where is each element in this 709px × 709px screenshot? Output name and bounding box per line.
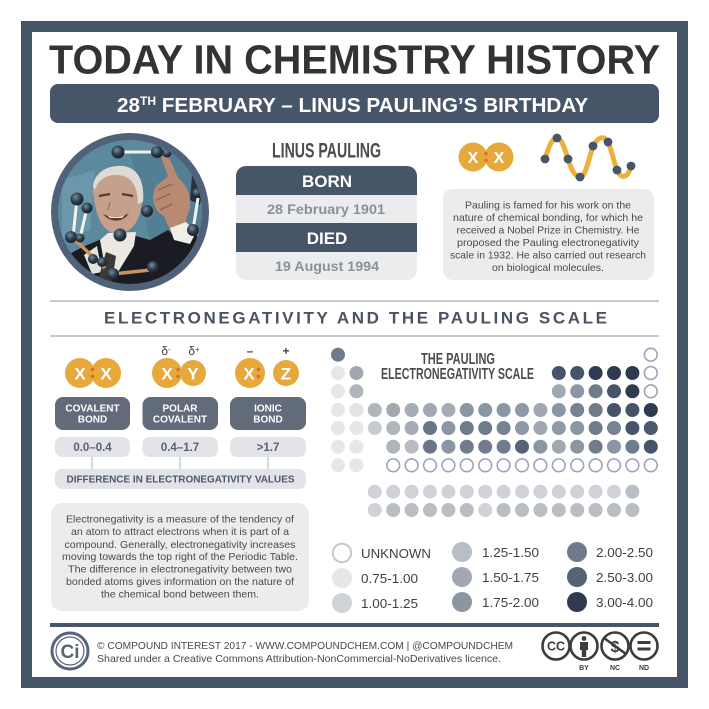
legend item: 3.00-4.00 [567, 592, 653, 612]
electronegativity explanation panel: compound. Generally, electronegativity increases [64, 540, 296, 551]
legend item: 2.50-3.00: 2.50-3.00 [596, 571, 653, 585]
biography text panel: nature of chemical bonding, for which he [453, 213, 643, 224]
icon: covalent bond atoms [65, 358, 121, 388]
legend [332, 542, 653, 613]
icon: polar covalent atoms: + [195, 345, 200, 354]
label: polar covalent: POLAR [162, 404, 198, 414]
legend item: 1.50-1.75: 1.50-1.75 [482, 571, 539, 585]
credit text: © COMPOUND INTEREST 2017 - WWW.COMPOUNDCHEM.COM | @COMPOUNDCHEM [97, 641, 513, 652]
legend item: 1.75-2.00: 1.75-2.00 [482, 596, 539, 610]
icon: NC: NC [610, 665, 620, 672]
Linus Pauling name heading: LINUS PAULING [272, 140, 381, 162]
icon: wave with atoms [541, 134, 635, 181]
label: covalent bond: BOND [78, 414, 107, 426]
electronegativity explanation panel: the chemical bond between them. [101, 590, 259, 601]
date banner [50, 84, 659, 123]
icon: polar covalent atoms: δ [161, 344, 168, 358]
periodic table dot chart [331, 348, 658, 517]
portrait of Linus Pauling [50, 133, 210, 300]
icon: covalent atoms: X [468, 150, 479, 167]
title: TODAY IN CHEMISTRY HISTORY [49, 36, 660, 82]
bonds [73, 152, 198, 238]
label: covalent bond: COVALENT [65, 404, 120, 414]
born and died table: DIED [307, 229, 347, 248]
periodic table heading: THE PAULING [421, 351, 495, 368]
icon: BY: BY [579, 665, 589, 672]
legend item: 1.25-1.50 [452, 542, 539, 562]
biography text panel: scale in 1932. He also carried out research [450, 250, 646, 261]
electronegativity explanation panel: an atom to attract electrons when it is part of a [71, 527, 289, 538]
biography text panel [443, 189, 654, 280]
Compound Interest logo [52, 633, 88, 669]
bond diagrams [55, 344, 306, 489]
Compound Interest logo: Ci [60, 642, 80, 663]
icon: covalent atoms: X [494, 150, 505, 167]
legend item: 1.00-1.25 [332, 593, 418, 613]
born and died table: 19 August 1994 [275, 258, 379, 274]
electronegativity explanation panel: moving towards the top right of the Periodic Table. [62, 552, 298, 563]
icon: ionic atoms: X [243, 364, 255, 384]
label: ionic bond [230, 397, 306, 430]
icon: polar covalent atoms: X [161, 364, 173, 384]
legend item: unknown: UNKNOWN [361, 547, 431, 561]
biography text panel: proposed the Pauling electronegativity [457, 238, 640, 249]
legend item: 2.00-2.50 [567, 542, 653, 562]
date banner: 28 [117, 94, 140, 117]
value: 0.0–0.4 [55, 437, 130, 457]
legend item: 1.00-1.25: 1.00-1.25 [361, 597, 418, 611]
electronegativity explanation panel: The difference in electronegativity between two [68, 565, 292, 576]
biography text panel: Pauling is famed for his work on the [465, 200, 631, 212]
born and died table: 28 February 1901 [267, 201, 385, 217]
icon: ionic atoms: – [247, 344, 254, 358]
difference in electronegativity bar: DIFFERENCE IN ELECTRONEGATIVITY VALUES [66, 474, 295, 486]
hand [153, 156, 190, 230]
legend item: unknown [333, 544, 431, 562]
legend item: 3.00-4.00: 3.00-4.00 [596, 596, 653, 610]
born and died table: BORN [302, 172, 352, 191]
label: ionic bond: IONIC [254, 404, 282, 414]
value: 0.4–1.7: 0.4–1.7 [161, 442, 199, 454]
icon: polar covalent atoms: δ [188, 344, 195, 358]
atoms [65, 146, 202, 280]
label: polar covalent [142, 397, 218, 430]
legend item: 1.75-2.00 [452, 592, 539, 612]
icon: polar covalent atoms: - [168, 345, 171, 354]
icon: ionic atoms [235, 344, 299, 388]
value: 0.4–1.7 [142, 437, 218, 457]
icon: polar covalent atoms [152, 344, 206, 388]
icon: NC [602, 632, 628, 672]
icon: ionic atoms: + [282, 344, 290, 358]
label: ionic bond: BOND [253, 414, 283, 426]
suit [71, 230, 198, 284]
biography text panel: on biological molecules. [492, 263, 604, 274]
icon: covalent atoms [458, 142, 514, 172]
periodic table heading [381, 351, 534, 383]
icon: covalent bond atoms: X [74, 364, 86, 384]
legend item: 0.75-1.00 [332, 568, 418, 588]
value: 0.0–0.4: 0.0–0.4 [73, 442, 112, 454]
icon: ND: ND [639, 665, 649, 672]
biography text panel: received a Nobel Prize in Chemistry. He [456, 225, 640, 236]
legend item: 1.50-1.75 [452, 567, 539, 587]
icon: NC: $ [611, 639, 620, 656]
legend item: 0.75-1.00: 0.75-1.00 [361, 572, 418, 586]
icon: CC: CC [547, 640, 565, 654]
legend item: 2.50-3.00 [567, 567, 653, 587]
date banner: FEBRUARY – LINUS PAULING’S BIRTHDAY [156, 94, 588, 117]
date banner: TH [140, 94, 156, 108]
face [93, 167, 142, 234]
section heading: ELECTRONEGATIVITY AND THE PAULING SCALE [104, 308, 607, 328]
licence icons [542, 632, 658, 672]
legend item: 2.00-2.50: 2.00-2.50 [596, 546, 653, 560]
credit text: Shared under a Creative Commons Attribution-NonCommercial-NoDerivatives licence. [97, 654, 501, 665]
periodic table heading: ELECTRONEGATIVITY SCALE [381, 366, 534, 383]
electronegativity explanation panel: Electronegativity is a measure of the tendency of [66, 514, 294, 526]
icon: polar covalent atoms: Y [187, 364, 199, 384]
icon: ionic atoms: Z [281, 364, 291, 384]
label: polar covalent: COVALENT [153, 414, 207, 426]
value: >1.7: >1.7 [257, 442, 279, 454]
icon: covalent bond atoms: X [100, 364, 112, 384]
born and died table [236, 166, 417, 280]
electronegativity explanation panel [51, 503, 309, 611]
difference in electronegativity bar [55, 469, 306, 489]
label: covalent bond [55, 397, 130, 430]
electronegativity explanation panel: bonded atoms gives information on the nature of [66, 577, 294, 588]
legend item: 1.25-1.50: 1.25-1.50 [482, 546, 539, 560]
credit text [97, 641, 513, 665]
value: >1.7 [230, 437, 306, 457]
